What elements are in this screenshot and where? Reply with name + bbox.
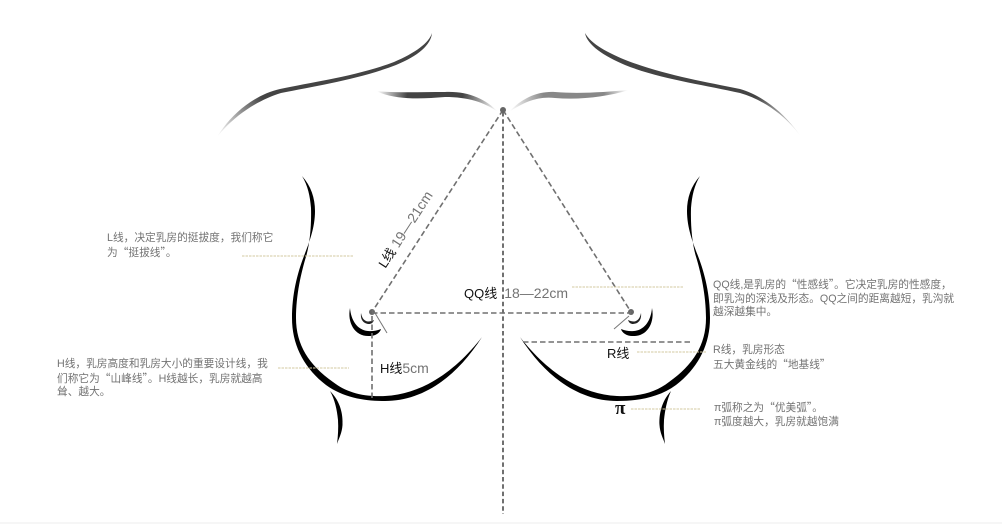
note: QQ line: 越深越集中。 — [713, 306, 777, 318]
right areola — [614, 308, 653, 336]
note: H line: 们称它为“山峰线”。H线越长，乳房就越高 — [57, 371, 262, 386]
note: R line: R线，乳房形态 — [713, 344, 785, 356]
note: R line: 五大黄金线的“地基线” — [713, 357, 831, 372]
note: H line: H线，乳房高度和乳房大小的重要设计线，我 — [57, 358, 268, 370]
note: L line: L线，决定乳房的挺拔度，我们称它 — [107, 232, 273, 244]
right shoulder — [585, 33, 801, 137]
note: H line: 耸、越大。 — [57, 386, 110, 398]
note: R line — [713, 344, 831, 372]
left areola — [349, 308, 387, 336]
pi label: π — [615, 398, 625, 419]
H line label: H线5cm — [380, 360, 429, 376]
left shoulder — [217, 33, 432, 137]
bottom rule — [0, 522, 1002, 524]
left lower curve — [330, 391, 343, 444]
note: QQ line: 即乳沟的深浅及形态。QQ之间的距离越短，乳沟就 — [713, 293, 954, 305]
right lower curve — [659, 391, 671, 444]
right collar — [509, 90, 629, 112]
tan leader lines — [242, 256, 706, 409]
note: QQ line — [713, 277, 954, 318]
L line label: L线 19—21cm — [375, 188, 436, 270]
note: L line: 为“挺拔线”。 — [107, 245, 177, 260]
note: pi arc: π弧度越大，乳房就越饱满 — [714, 416, 839, 428]
note: H line — [57, 358, 268, 398]
left breast outline — [292, 176, 482, 401]
note: QQ line: QQ线,是乳房的“性感线”。它决定乳房的性感度， — [713, 277, 952, 292]
right breast outline — [520, 176, 710, 401]
dashed measurement lines — [372, 110, 692, 514]
note: pi arc — [714, 400, 839, 428]
note: pi arc: π弧称之为“优美弧”。 — [714, 400, 823, 415]
left collar — [376, 91, 498, 112]
QQ line label: QQ线 18—22cm — [464, 285, 568, 301]
R line label: R线 — [607, 346, 629, 361]
note: L line — [107, 232, 273, 260]
sternum point — [500, 107, 506, 113]
